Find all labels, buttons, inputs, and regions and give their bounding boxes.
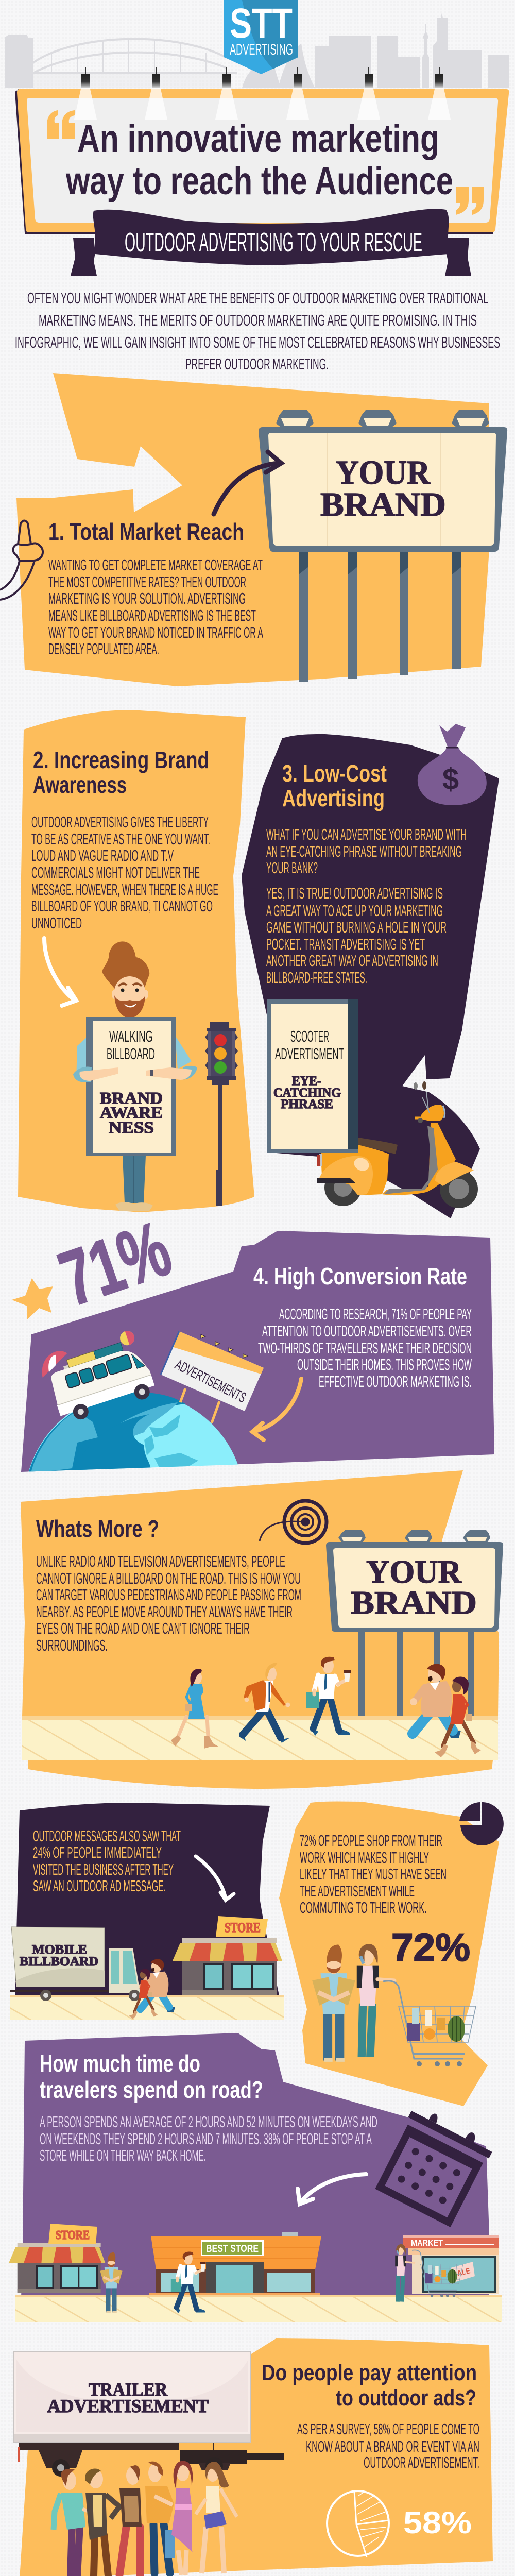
mobile billboard truck xyxy=(10,1927,140,2001)
icon: pointing hand xyxy=(0,520,43,600)
STT logo top xyxy=(224,0,298,74)
billboard: your brand 2: BRAND xyxy=(351,1584,477,1621)
body text: WAY TO GET YOUR BRAND NOTICED IN TRAFFIC OR A xyxy=(48,623,263,641)
heading: 3. Low-Cost xyxy=(282,760,387,787)
billboard: your brand: BRAND xyxy=(320,486,446,523)
mobile billboard truck: MOBILE xyxy=(32,1943,87,1957)
best store: BEST STORE xyxy=(206,2243,259,2255)
72% stat: 72% xyxy=(391,1926,470,1970)
heading: Whats More ? xyxy=(36,1515,159,1542)
heading: 2. Increasing Brand xyxy=(33,747,209,773)
advertisements sign xyxy=(161,1331,264,1423)
body text xyxy=(40,2113,377,2164)
campervan xyxy=(36,1326,158,1427)
intro paragraph: PREFER OUTDOOR MARKETING. xyxy=(185,355,329,373)
icon: sketched pie chart xyxy=(327,2491,389,2557)
icon: star xyxy=(12,1278,53,1320)
body text: BILLBOARD OF YOUR BRAND, TI CANNOT GO xyxy=(31,897,213,915)
scooter billboard: SCOOTER xyxy=(290,1027,329,1045)
billboard posts xyxy=(358,1632,474,1716)
scooter xyxy=(317,1081,478,1208)
panel: increasing brand awareness xyxy=(18,710,254,1212)
trailer advertisement box xyxy=(14,2351,251,2442)
body text: LOUD AND VAGUE RADIO AND T.V xyxy=(31,846,174,865)
scooter billboard: PHRASE xyxy=(281,1097,333,1111)
billboard posts xyxy=(299,552,461,682)
body text xyxy=(36,1552,301,1654)
scooter billboard: CATCHING xyxy=(273,1086,341,1100)
trailer advertisement box: TRAILER xyxy=(89,2379,168,2400)
body text: STORE WHILE ON THEIR WAY BACK HOME. xyxy=(40,2146,206,2164)
58% stat: 58% xyxy=(403,2505,472,2540)
panel: travel time xyxy=(9,2033,502,2322)
body text: SAW AN OUTDOOR AD MESSAGE. xyxy=(33,1877,166,1895)
icon: money bag xyxy=(418,724,487,805)
body text: MARKETING IS YOUR SOLUTION. ADVERTISING xyxy=(48,589,246,607)
arrow: white xyxy=(298,2174,366,2204)
body text: YOUR BANK? xyxy=(266,859,318,877)
walking billboard man xyxy=(73,941,197,1211)
heading: Do people pay attention xyxy=(262,2360,477,2385)
store: STORE xyxy=(225,1920,261,1935)
body text: MESSAGE. HOWEVER, WHEN THERE IS A HUGE xyxy=(31,880,218,899)
billboard: your brand 2 xyxy=(326,1530,503,1632)
store left xyxy=(9,2224,105,2293)
panel: outdoor messages xyxy=(10,1803,284,2020)
body text xyxy=(33,1827,181,1895)
group of people xyxy=(54,2461,237,2576)
icon: calendar xyxy=(372,2104,496,2229)
body text: DENSELY POPULATED AREA. xyxy=(48,640,159,658)
icon: target xyxy=(260,1501,327,1543)
arrow: curved to billboard xyxy=(214,452,281,514)
sidewalk xyxy=(15,2295,502,2322)
pedestrians xyxy=(171,1657,481,1757)
sign board: WALKING xyxy=(109,1027,153,1045)
shopping bag xyxy=(165,2530,175,2558)
store left: STORE xyxy=(56,2229,90,2242)
scooter billboard: ADVERTISMENT xyxy=(275,1045,344,1063)
body text: TO BE AS CREATIVE AS THE ONE YOU WANT. xyxy=(31,830,210,848)
body text xyxy=(258,1305,472,1391)
body text: WANTING TO GET COMPLETE MARKET COVERAGE AT xyxy=(48,556,263,574)
spotlights xyxy=(74,67,451,120)
STT logo top: STT xyxy=(230,0,293,47)
heading: Awareness xyxy=(33,771,127,798)
panel: outdoor messages: OUTDOOR MESSAGES ALSO SAW THAT xyxy=(33,1827,181,1845)
body text: VISITED THE BUSINESS AFTER THEY xyxy=(33,1860,174,1878)
panel: total market reach xyxy=(0,373,507,686)
main title xyxy=(65,117,453,203)
trailer chassis xyxy=(18,2439,284,2477)
title billboard xyxy=(15,67,509,233)
body text: 24% OF PEOPLE IMMEDIATELY xyxy=(33,1843,162,1861)
heading xyxy=(282,760,387,811)
person 1 xyxy=(54,2469,103,2576)
icon: money bag: $ xyxy=(442,762,459,796)
person 2 xyxy=(85,2468,119,2576)
best store xyxy=(149,2232,321,2295)
body text: UNLIKE RADIO AND TELEVISION ADVERTISEMENTS, PEOPLE xyxy=(36,1552,285,1570)
intro paragraph xyxy=(15,289,500,373)
shopping couple xyxy=(312,1944,476,2066)
sidewalk xyxy=(10,1995,284,2020)
traffic light xyxy=(205,1022,238,1206)
heading: Advertising xyxy=(282,785,385,811)
body text xyxy=(300,1832,447,1917)
market xyxy=(403,2235,499,2294)
panel: whats more xyxy=(21,1470,503,1789)
panel: 72 percent shop xyxy=(279,1801,504,2106)
billboard: your brand: YOUR xyxy=(336,454,431,492)
shoppers xyxy=(100,2244,463,2313)
person 3 xyxy=(119,2465,142,2575)
71% stat: 71% xyxy=(49,1205,181,1322)
heading xyxy=(40,2050,263,2103)
top city skyline xyxy=(5,13,509,88)
mobile billboard truck: BILLBOARD xyxy=(20,1955,98,1969)
advertisements sign: ADVERTISEMENTS xyxy=(173,1357,249,1405)
market: SALE xyxy=(452,2266,471,2279)
globe xyxy=(29,1392,238,1471)
heading: to outdoor ads? xyxy=(336,2385,476,2411)
STT logo top: ADVERTISING xyxy=(230,41,293,58)
subtitle ribbon xyxy=(71,209,471,276)
heading: travelers spend on road? xyxy=(40,2076,263,2103)
store xyxy=(173,1916,282,1995)
arms xyxy=(73,1066,197,1082)
sign board: BILLBOARD xyxy=(107,1045,155,1063)
heading xyxy=(33,747,209,798)
body text: OUTDOOR ADVERTISING GIVES THE LIBERTY xyxy=(31,813,209,831)
arrow: white down xyxy=(44,938,76,1006)
body text xyxy=(266,825,467,987)
market: MARKET xyxy=(411,2238,443,2248)
heading xyxy=(262,2360,477,2411)
heading: How much time do xyxy=(40,2050,200,2077)
sign board: AWARE xyxy=(100,1103,163,1122)
scooter billboard xyxy=(267,999,358,1153)
quote marks xyxy=(47,110,484,215)
body text: EYES ON THE ROAD AND ONE CAN'T IGNORE THEIR xyxy=(36,1619,250,1637)
billboard: your brand xyxy=(259,410,507,552)
couple walking xyxy=(129,1959,175,2019)
panel: low-cost advertising xyxy=(242,724,499,1218)
body text: SURROUNDINGS. xyxy=(36,1636,108,1654)
panel: pay attention xyxy=(14,2338,493,2576)
icon: pie chart xyxy=(459,1802,504,1845)
panel: high conversion rate xyxy=(12,1223,494,1472)
person 6 xyxy=(196,2462,237,2573)
person 5 xyxy=(171,2461,193,2575)
sign board xyxy=(86,1017,176,1156)
scooter billboard: EYE- xyxy=(292,1074,321,1088)
body text: UNNOTICED xyxy=(31,914,82,932)
arrow: white xyxy=(196,1856,234,1900)
trailer advertisement box: ADVERTISEMENT xyxy=(47,2396,209,2416)
billboard: your brand 2: YOUR xyxy=(366,1553,462,1590)
body text: BILLBOARD-FREE STATES. xyxy=(266,969,367,987)
body text: THE MOST COMPETITIVE RATES? THEN OUTDOOR xyxy=(48,573,246,591)
body text: COMMERCIALS MIGHT NOT DELIVER THE xyxy=(31,863,200,882)
sign board: BRAND xyxy=(100,1089,163,1107)
body text xyxy=(48,556,263,658)
body text: MEANS LIKE BILLBOARD ADVERTISING IS THE BEST xyxy=(48,606,256,624)
arrow: orange xyxy=(252,1379,301,1440)
heading: 1. Total Market Reach xyxy=(48,518,244,545)
body text xyxy=(297,2420,479,2471)
sidewalk xyxy=(22,1716,498,1760)
person 4 xyxy=(145,2462,174,2573)
sign board: NESS xyxy=(109,1118,154,1137)
body text xyxy=(31,813,218,932)
